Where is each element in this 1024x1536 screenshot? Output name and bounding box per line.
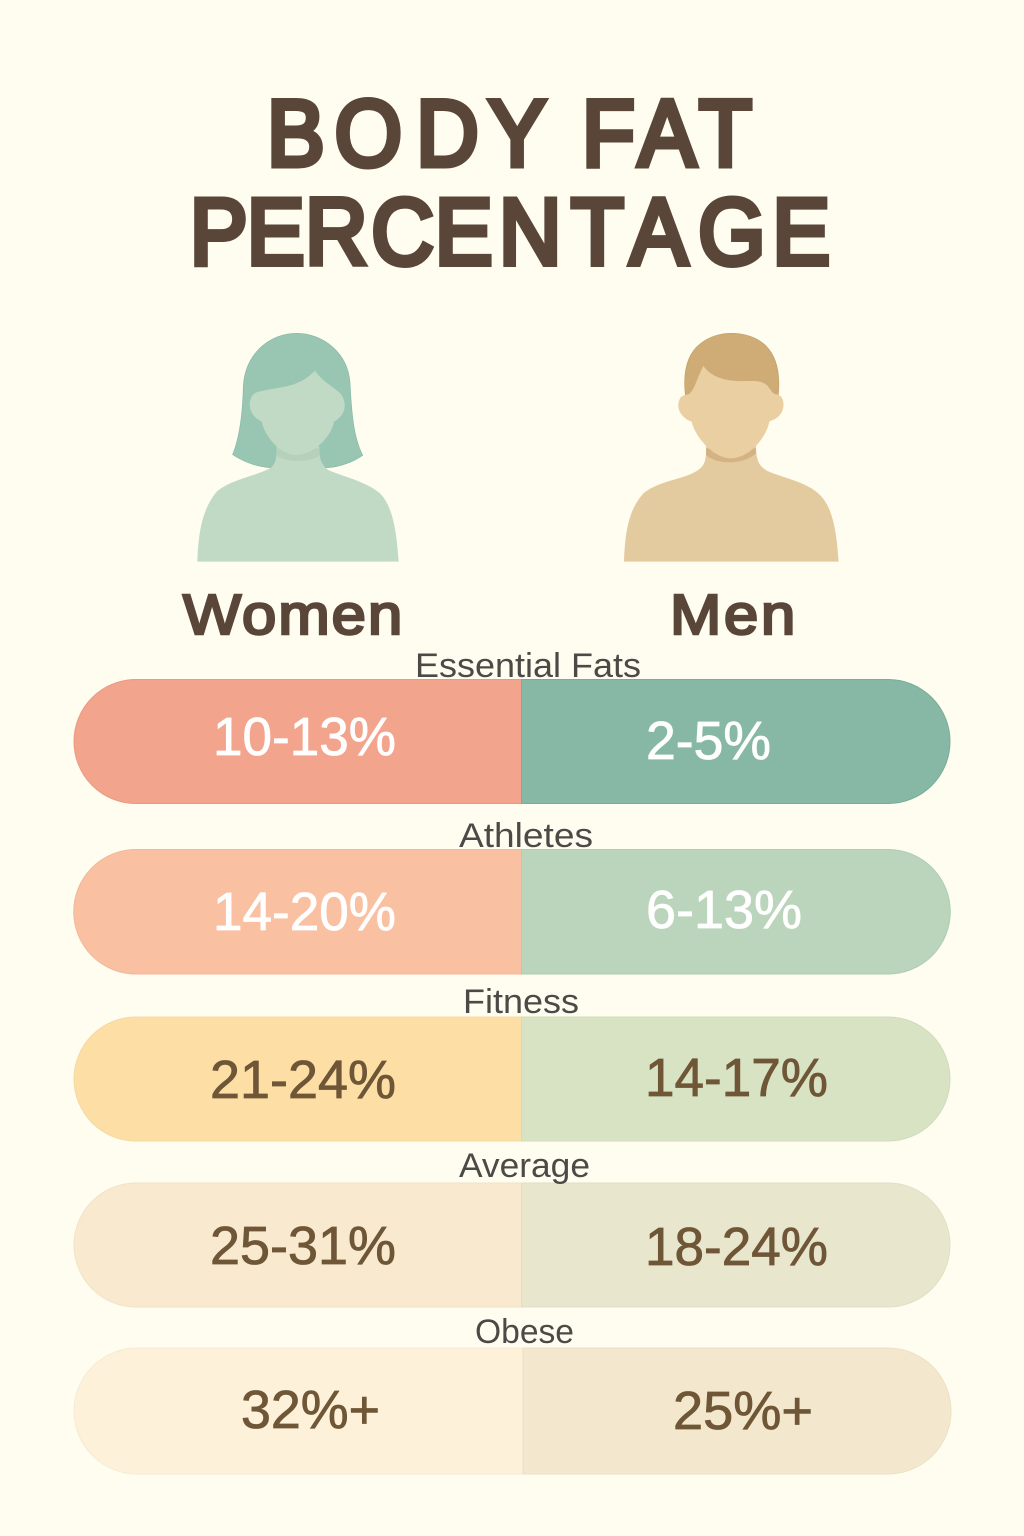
row: Essential Fats: 2-5% xyxy=(646,711,771,771)
heading: Men: Men xyxy=(670,582,795,646)
row: Obese: Obese xyxy=(475,1313,574,1351)
icon: man xyxy=(624,333,839,562)
row: Athletes: 14-20% xyxy=(213,882,396,942)
title: PERCENTAGE xyxy=(190,180,830,285)
row: Fitness: 21-24% xyxy=(210,1050,396,1110)
row: Average: 18-24% xyxy=(645,1217,828,1277)
row: Fitness: Fitness xyxy=(463,983,579,1021)
title xyxy=(190,81,830,285)
row: Essential Fats xyxy=(74,647,950,804)
row: Athletes: 6-13% xyxy=(646,880,802,940)
row: Obese: 32%+ xyxy=(241,1380,380,1440)
row: Athletes xyxy=(74,817,950,974)
row: Average xyxy=(74,1147,950,1307)
row: Athletes: Athletes xyxy=(459,817,593,855)
heading: Women: Women xyxy=(183,582,402,646)
row: Essential Fats: Essential Fats xyxy=(415,647,641,685)
title: BODY FAT xyxy=(267,81,752,186)
row: Average: 25-31% xyxy=(210,1216,396,1276)
row: Average: Average xyxy=(459,1147,590,1185)
row: Essential Fats: 10-13% xyxy=(213,707,396,767)
row: Fitness xyxy=(74,983,950,1141)
row: Fitness: 14-17% xyxy=(645,1048,828,1108)
row: Obese: 25%+ xyxy=(673,1381,813,1441)
row: Obese xyxy=(74,1313,951,1474)
icon: woman xyxy=(197,333,399,562)
